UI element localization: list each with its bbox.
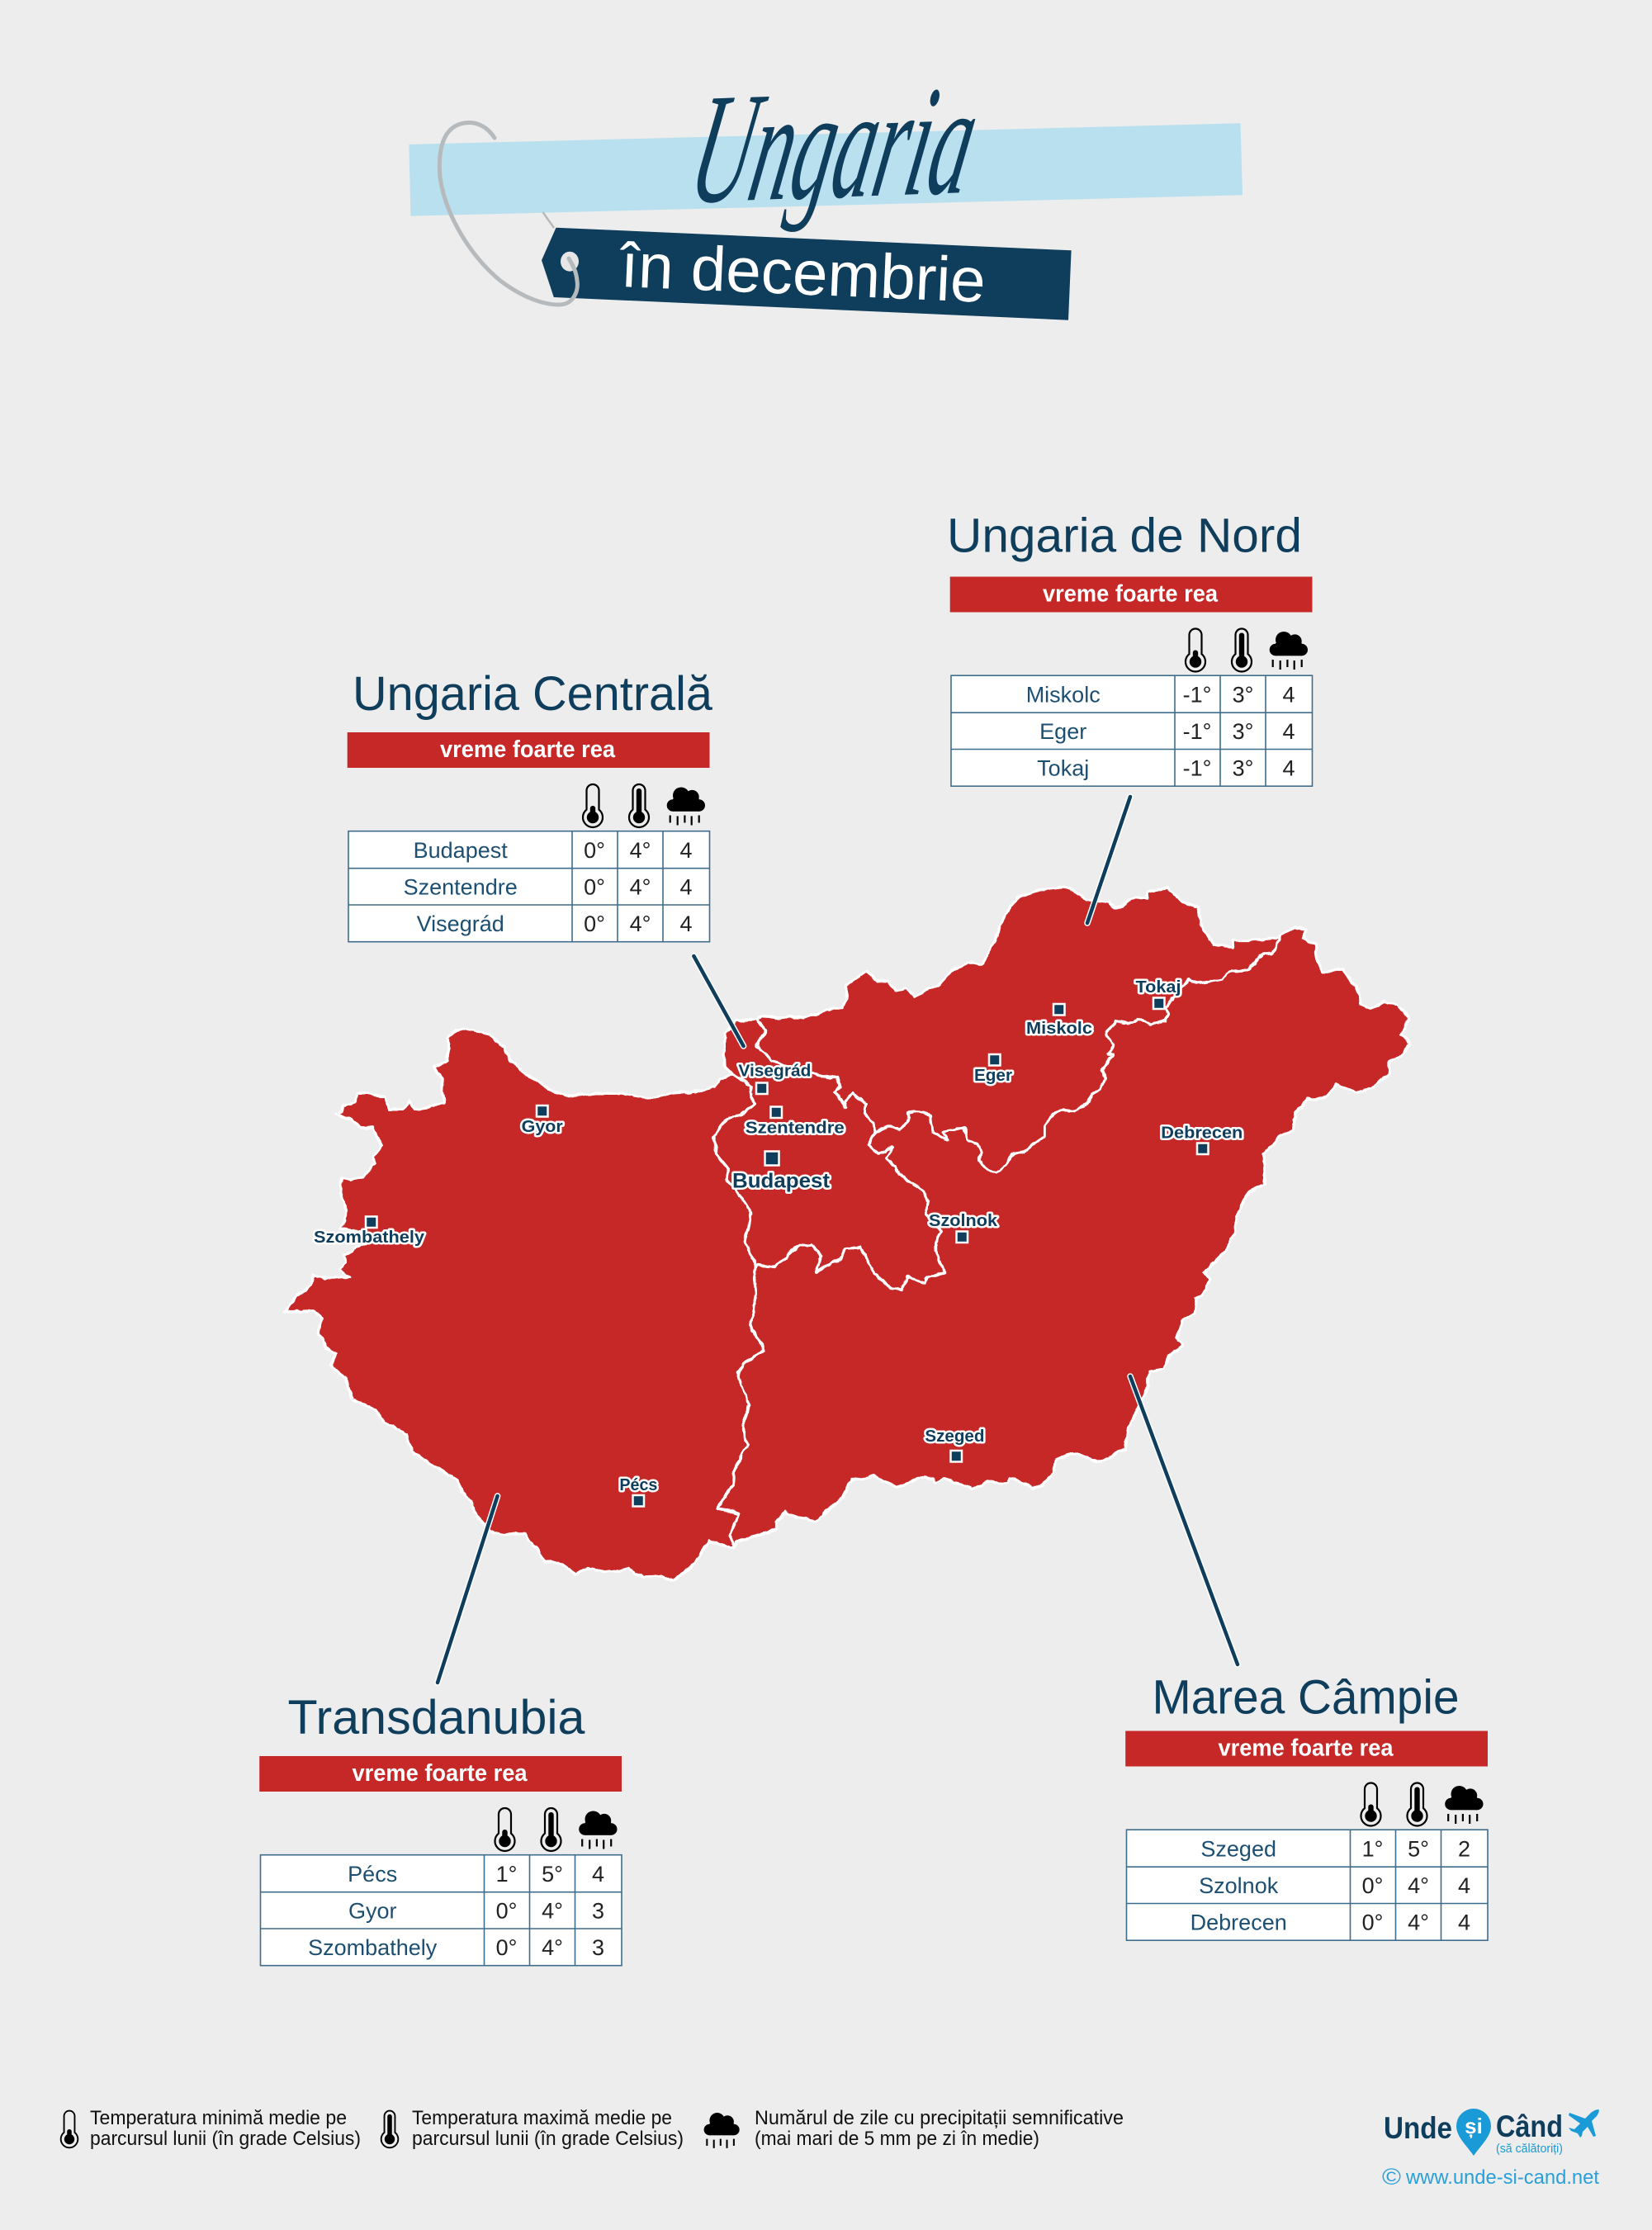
region: Ungaria Centrală bbox=[714, 1020, 944, 1290]
table: 5° bbox=[542, 1862, 563, 1887]
table: 5° bbox=[1408, 1836, 1429, 1861]
website: www.unde-si-cand.net bbox=[1405, 2166, 1599, 2189]
leader line: Ungaria de Nord bbox=[1087, 797, 1130, 923]
legend text: max temperature: Temperatura maximă medie pe bbox=[412, 2107, 672, 2129]
city: Tokaj bbox=[1136, 978, 1181, 1009]
table bbox=[261, 1855, 622, 1966]
rating bar bbox=[259, 1756, 622, 1792]
table: 1° bbox=[1362, 1836, 1383, 1861]
table: Tokaj bbox=[1037, 756, 1089, 781]
icon: legend max temperature bbox=[381, 2111, 398, 2147]
rating bar: vreme foarte rea bbox=[1219, 1735, 1394, 1762]
city: Budapest: Budapest bbox=[732, 1169, 831, 1192]
panel: Ungaria de Nord bbox=[947, 509, 1313, 786]
region: Ungaria de Nord bbox=[756, 887, 1281, 1172]
table: Miskolc bbox=[1026, 682, 1101, 707]
city: Miskolc bbox=[1026, 1004, 1092, 1038]
city: Budapest bbox=[732, 1151, 831, 1192]
heading: Transdanubia bbox=[287, 1691, 585, 1745]
icon: rain cloud bbox=[1445, 1786, 1483, 1824]
leader line: Transdanubia bbox=[438, 1496, 498, 1683]
legend text: rainy days: Numărul de zile cu precipitații semnificative bbox=[755, 2107, 1124, 2129]
title banner bbox=[409, 51, 1243, 320]
table: 4 bbox=[592, 1862, 604, 1887]
region: Marea Câmpie bbox=[718, 926, 1410, 1547]
rating bar bbox=[1125, 1730, 1488, 1767]
table: 4 bbox=[679, 838, 693, 863]
icon: min temperature bbox=[1186, 629, 1205, 671]
table: 3° bbox=[1233, 719, 1253, 744]
table bbox=[951, 675, 1313, 786]
rating bar: vreme foarte rea bbox=[1043, 581, 1219, 608]
panel: Transdanubia bbox=[259, 1691, 622, 1966]
table: 0° bbox=[1362, 1873, 1383, 1898]
icon: rain cloud bbox=[1270, 632, 1308, 670]
ring wire behind ribbon bbox=[543, 212, 554, 228]
table: 2 bbox=[1458, 1836, 1470, 1861]
table: 1° bbox=[496, 1862, 517, 1887]
table: -1° bbox=[1183, 682, 1211, 707]
logo wordmark right: Când bbox=[1496, 2109, 1563, 2143]
table: 0° bbox=[496, 1935, 517, 1960]
table: 3° bbox=[1233, 756, 1253, 781]
city: Szolnok: Szolnok bbox=[929, 1212, 998, 1230]
icon: max temperature bbox=[1232, 629, 1252, 671]
table: 4° bbox=[1408, 1910, 1429, 1935]
logo subtitle: (să călătoriți) bbox=[1496, 2142, 1563, 2156]
icon: min temperature bbox=[495, 1808, 515, 1851]
legend text: min temperature: Temperatura minimă medie pe bbox=[90, 2107, 347, 2129]
table: -1° bbox=[1183, 756, 1211, 781]
city: Szeged: Szeged bbox=[925, 1427, 984, 1446]
table bbox=[348, 831, 710, 942]
map of Hungary bbox=[285, 887, 1410, 1580]
icon: min temperature bbox=[1361, 1783, 1380, 1825]
city: Pécs: Pécs bbox=[619, 1476, 657, 1494]
table: 0° bbox=[584, 875, 605, 900]
rating bar bbox=[348, 732, 710, 768]
table: Szolnok bbox=[1199, 1873, 1279, 1898]
table: 4 bbox=[1282, 682, 1295, 707]
table: 3° bbox=[1233, 682, 1253, 707]
table: 4 bbox=[1458, 1873, 1470, 1898]
legend text: min temperature bbox=[90, 2107, 361, 2150]
leader line: Ungaria Centrală bbox=[693, 956, 744, 1046]
city: Szentendre: Szentendre bbox=[746, 1120, 845, 1138]
table: 4° bbox=[630, 838, 651, 863]
rating bar: vreme foarte rea bbox=[352, 1760, 528, 1787]
panel: Marea Câmpie bbox=[1125, 1671, 1488, 1940]
table: 0° bbox=[1362, 1910, 1383, 1935]
icon: rain cloud bbox=[667, 788, 705, 826]
heading: Ungaria de Nord bbox=[947, 509, 1302, 563]
rating bar: vreme foarte rea bbox=[440, 736, 616, 763]
table bbox=[1126, 1830, 1488, 1940]
icon: max temperature bbox=[542, 1808, 561, 1851]
table: 0° bbox=[584, 911, 605, 936]
table: Visegrád bbox=[417, 911, 504, 936]
table: 4° bbox=[630, 911, 651, 936]
table: Szombathely bbox=[308, 1935, 438, 1960]
city: Szentendre bbox=[746, 1106, 845, 1138]
luggage tag bbox=[542, 228, 1072, 320]
table: 0° bbox=[496, 1899, 517, 1924]
city: Tokaj: Tokaj bbox=[1136, 978, 1181, 997]
table: 4 bbox=[679, 875, 693, 900]
city: Győr bbox=[522, 1106, 563, 1136]
legend text: rainy days: (mai mari de 5 mm pe zi în medie) bbox=[755, 2128, 1039, 2150]
table: 4° bbox=[542, 1899, 563, 1924]
ring wire bbox=[439, 123, 577, 305]
city: Eger bbox=[974, 1054, 1012, 1085]
city: Visegrád bbox=[738, 1062, 811, 1094]
table: 0° bbox=[584, 838, 605, 863]
light blue ribbon bbox=[409, 123, 1243, 216]
subtitle: în decembrie bbox=[618, 230, 987, 316]
heading: Ungaria Centrală bbox=[353, 667, 713, 721]
table: 4° bbox=[630, 875, 651, 900]
city: Győr: Gyor bbox=[522, 1118, 563, 1136]
panel: Ungaria Centrală bbox=[348, 667, 713, 942]
city: Debrecen: Debrecen bbox=[1161, 1124, 1243, 1143]
logo: Unde și Când bbox=[1382, 2109, 1599, 2190]
legend text: rainy days bbox=[755, 2107, 1124, 2150]
city: Visegrád: Visegrád bbox=[738, 1062, 811, 1080]
icon: airplane bbox=[1569, 2109, 1599, 2138]
legend text: min temperature: parcursul lunii (în grade Celsius) bbox=[90, 2128, 361, 2150]
title script: Ungaria bbox=[679, 51, 992, 237]
city: Miskolc: Miskolc bbox=[1026, 1020, 1092, 1038]
icon: legend rain cloud bbox=[704, 2113, 740, 2148]
table: 3 bbox=[592, 1935, 604, 1960]
table: 4° bbox=[1408, 1873, 1429, 1898]
region: Transdanubia bbox=[285, 1028, 764, 1580]
table: -1° bbox=[1183, 719, 1211, 744]
table: 4 bbox=[1282, 719, 1295, 744]
city: Szolnok bbox=[929, 1212, 998, 1243]
table: Debrecen bbox=[1190, 1910, 1287, 1935]
table: 3 bbox=[592, 1899, 604, 1924]
table: 4 bbox=[679, 911, 693, 936]
icon: rain cloud bbox=[579, 1811, 618, 1849]
website: © bbox=[1382, 2164, 1401, 2190]
heading: Marea Câmpie bbox=[1153, 1671, 1460, 1724]
table: Szentendre bbox=[404, 875, 518, 900]
icon: legend min temperature bbox=[61, 2111, 78, 2147]
table: Budapest bbox=[414, 838, 508, 863]
logo wordmark left: Unde bbox=[1384, 2111, 1452, 2145]
icon: min temperature bbox=[583, 784, 603, 827]
table: Gyor bbox=[348, 1899, 396, 1924]
city: Szeged bbox=[925, 1427, 984, 1461]
leader line: Marea Câmpie bbox=[1130, 1376, 1238, 1664]
city: Pécs bbox=[619, 1476, 657, 1506]
city: Szombathely bbox=[314, 1217, 425, 1247]
icon: location pin: și bbox=[1465, 2114, 1483, 2138]
city: Eger: Eger bbox=[974, 1067, 1012, 1085]
table: Eger bbox=[1039, 719, 1086, 744]
city: Szombathely: Szombathely bbox=[314, 1229, 425, 1247]
legend text: max temperature bbox=[412, 2107, 684, 2150]
table: 4 bbox=[1282, 756, 1295, 781]
legend bbox=[61, 2107, 1124, 2150]
table: Pécs bbox=[348, 1862, 397, 1887]
table: 4 bbox=[1458, 1910, 1470, 1935]
icon: max temperature bbox=[1407, 1783, 1427, 1825]
icon: location pin bbox=[1456, 2109, 1491, 2156]
city: Debrecen bbox=[1161, 1124, 1243, 1154]
tag hole bbox=[561, 252, 579, 272]
legend text: max temperature: parcursul lunii (în grade Celsius) bbox=[412, 2128, 684, 2150]
table: 4° bbox=[542, 1935, 563, 1960]
table: Szeged bbox=[1200, 1836, 1276, 1861]
icon: max temperature bbox=[629, 784, 649, 827]
rating bar bbox=[950, 576, 1313, 613]
